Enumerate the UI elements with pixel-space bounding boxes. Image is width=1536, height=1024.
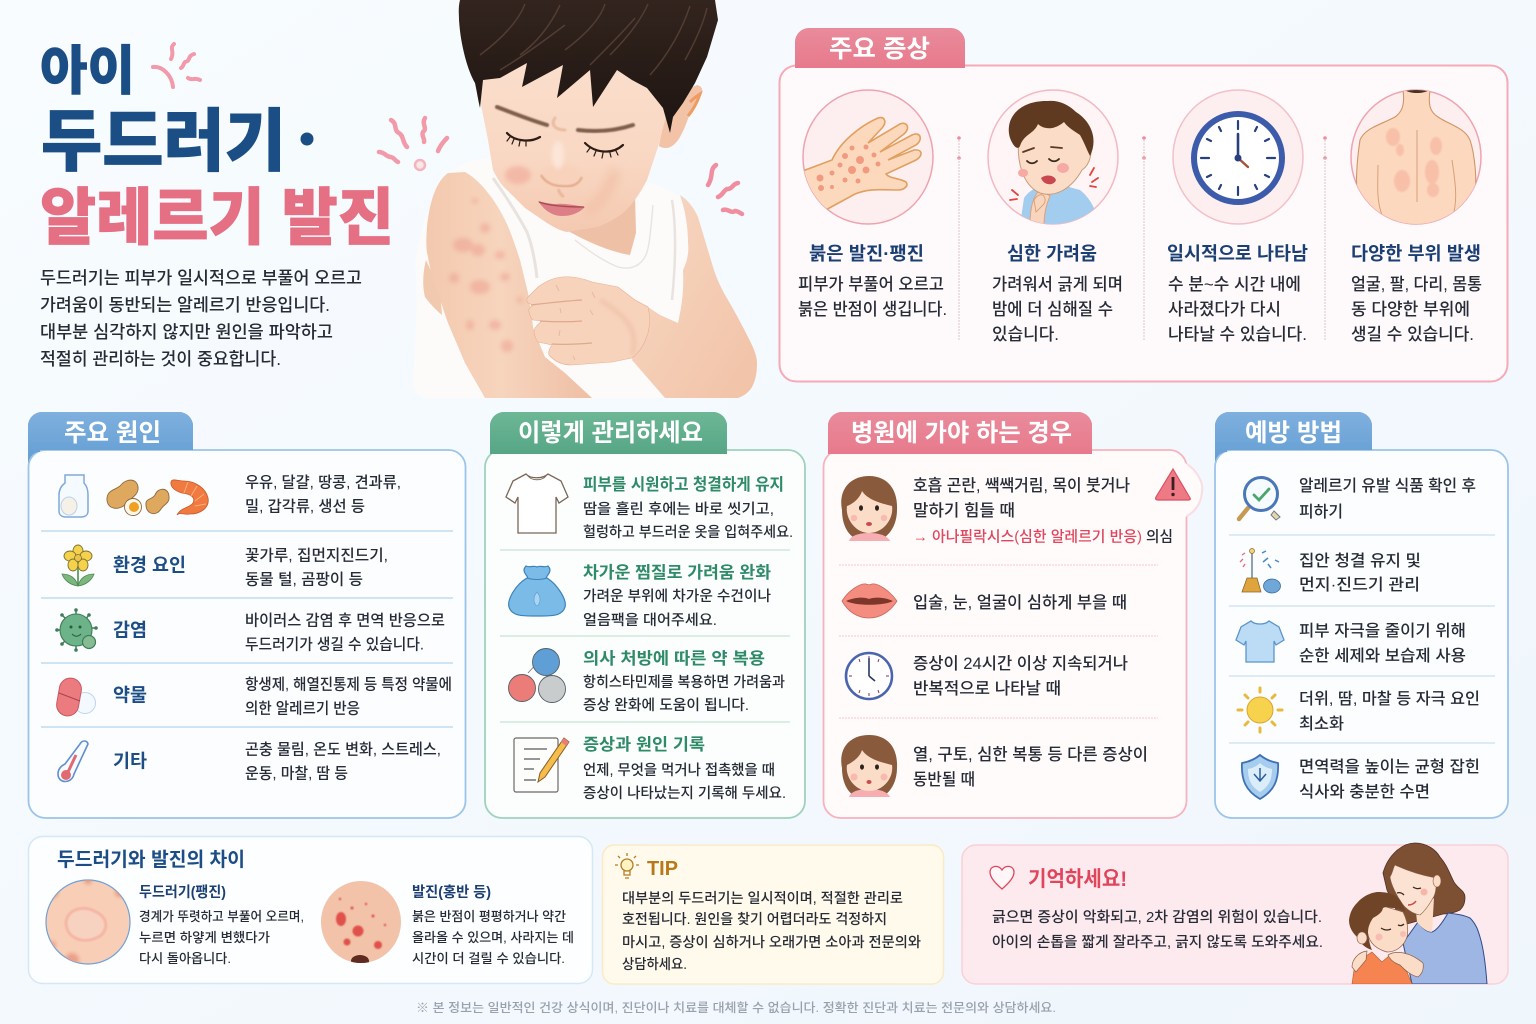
mouth [538,201,585,216]
heading: TIP: TIP [647,858,678,880]
prevention items text: 면역력을 높이는 균형 잡힌 [1299,758,1480,776]
panel: hives vs rash [28,836,592,984]
face [480,63,666,232]
panel: prevention [1215,412,1508,818]
text: remember: 긁으면 증상이 악화되고, 2차 감염의 위험이 있습니다. [992,909,1322,926]
prevention items text: 피하기 [1299,503,1343,521]
hospital items text: 동반될 때 [913,770,975,789]
prevention items text: 알레르기 유발 식품 확인 후 [1299,477,1476,495]
hospital items text: 호흡 곤란, 쌕쌕거림, 목이 붓거나 [913,476,1130,495]
manage items text: 차가운 찜질로 가려움 완화 [583,563,771,582]
text: tip: 대부분의 두드러기는 일시적이며, 적절한 관리로 [622,890,903,907]
tab text: prevention: 예방 방법 [1245,419,1342,447]
icon: broom [1240,548,1280,593]
footer disclaimer: ※ 본 정보는 일반적인 건강 상식이며, 진단이나 치료를 대체할 수 없습니다. 정확한 진단과 치료는 전문의와 상담하세요. [416,1000,1056,1015]
manage items text: 가려운 부위에 차가운 수건이나 [583,588,771,605]
hand [527,277,650,365]
cheek [505,166,531,184]
text: rash: 붉은 반점이 평평하거나 약간 [412,909,566,924]
text: hives: 두드러기(팽진) [139,884,226,901]
icon: clock small [846,653,892,699]
causes text: 항생제, 해열진통제 등 특정 약물에 [245,676,452,694]
icon: flower [62,545,94,586]
icon: shield [1242,755,1278,799]
label: drugs: 약물 [113,684,147,706]
icon: feverish girl [841,735,897,797]
icon: clock [1173,90,1303,224]
icon: itch squiggles near shoulder [379,118,447,170]
manage items text: 항히스타민제를 복용하면 가려움과 [583,674,785,691]
manage items text: 의사 처방에 따른 약 복용 [583,649,765,668]
icon: t-shirt [506,474,568,533]
text: tip: 마시고, 증상이 심하거나 오래가면 소아과 전문의와 [622,934,921,951]
label: environment: 환경 요인 [113,554,186,576]
text: hives: 누르면 하얗게 변했다가 [139,930,270,945]
prevention items text: 최소화 [1299,715,1344,733]
label: other: 기타 [113,750,147,772]
causes text: 우유, 달걀, 땅콩, 견과류, [245,474,401,492]
label: severe itch: 심한 가려움 [1007,243,1097,264]
icon: cold pack [509,566,565,616]
panel: main symptoms [780,28,1508,382]
photo: hives [46,876,130,967]
photo: rash [321,881,401,967]
label: temporary: 사라졌다가 다시 [1168,300,1281,319]
label: various areas [1351,243,1482,344]
tab: symptoms: 주요 증상 [829,35,930,63]
manage items text: 증상이 나타났는지 기록해 두세요. [583,785,786,802]
other arm and forearm [632,195,757,398]
icon: magnifier [1239,478,1280,520]
panel: how to manage [485,412,805,818]
label: various areas: 생길 수 있습니다. [1351,325,1474,344]
label: temporary [1167,243,1308,344]
prevention items text: 순한 세제와 보습제 사용 [1299,647,1466,665]
icon: peanuts and egg [107,480,169,516]
icon: light bulb [615,853,639,878]
child head [1367,905,1408,952]
causes text: 운동, 마찰, 땀 등 [245,764,348,782]
causes text: 꽃가루, 집먼지진드기, [245,546,388,564]
panel: tip [602,845,944,984]
icon: worried girl [841,476,897,541]
intro text: 가려움이 동반되는 알레르기 반응입니다. [40,295,330,315]
tab text: manage: 이렇게 관리하세요 [518,419,703,447]
hands [1388,952,1423,977]
manage items text [583,475,793,802]
icon: hand with rash [802,89,934,225]
intro text: 적절히 관리하는 것이 중요합니다. [40,349,281,369]
prevention items text [1299,477,1480,801]
title: 두드러기 [41,104,286,180]
icon: medicine balls [508,648,566,702]
tab: manage [490,412,727,460]
icon: notebook and pencil [514,738,569,792]
icon: itchy boy [988,90,1118,225]
text: hives: 경계가 뚜렷하고 부풀어 오르며, [139,909,304,924]
intro text: 대부분 심각하지 않지만 원인을 파악하고 [40,322,333,342]
mother face [1390,865,1436,915]
causes text: 밀, 갑각류, 생선 등 [245,498,365,516]
tank top [413,158,688,398]
manage items text: 피부를 시원하고 청결하게 유지 [583,475,784,494]
text: hives [139,884,304,966]
rash spots [449,198,523,352]
cheek shade [585,170,615,212]
text: rash: 시간이 더 걸릴 수 있습니다. [412,951,565,966]
brows [497,107,633,131]
tab: prevention [1215,412,1372,470]
tab: hospital [828,412,1092,460]
prevention items text: 식사와 충분한 수면 [1299,783,1430,801]
illustration: child scratching arm [413,0,757,398]
icon: shrimp [171,480,208,515]
icon: itch squiggles by title [153,44,200,87]
prevention items text: 피부 자극을 줄이기 위해 [1299,622,1466,640]
child shirt [1352,952,1412,984]
illustration: mother and child [1349,843,1487,984]
text: tip: 상담하세요. [622,956,687,973]
torso skin sliver [423,260,442,315]
mother neck [1416,898,1434,932]
tab text: causes: 주요 원인 [64,419,161,447]
label: temporary: 수 분~수 시간 내에 [1168,275,1301,294]
panel: main causes [28,412,466,818]
tab: symptoms [795,28,965,68]
causes text: 곤충 물림, 온도 변화, 스트레스, [245,740,441,758]
label: severe itch: 가려워서 긁게 되며 [992,275,1123,294]
label: red rash: 붉은 반점이 생깁니다. [798,300,947,319]
icon: sun [1238,688,1282,732]
text: tip: 호전됩니다. 원인을 찾기 어렵더라도 걱정하지 [622,911,887,928]
mother body [1403,913,1487,984]
hospital items text: 입술, 눈, 얼굴이 심하게 부을 때 [913,593,1127,612]
prevention items text: 더위, 땀, 마찰 등 자극 요인 [1299,690,1480,708]
causes text [245,474,452,782]
hospital items text: 의심 [1146,528,1173,546]
ear [659,85,702,148]
icon: heart [990,866,1014,889]
title: 아이 [40,42,135,101]
tab: causes [28,412,193,470]
text: remember [992,909,1323,951]
label: red rash: 피부가 부풀어 오르고 [798,275,944,294]
prevention items text: 먼지·진드기 관리 [1299,576,1420,594]
text: hives: 다시 돌아옵니다. [139,951,231,966]
hospital items text: 열, 구토, 심한 복통 등 다른 증상이 [913,745,1148,764]
label: red rash [798,243,947,319]
label: various areas: 얼굴, 팔, 다리, 몸통 [1351,275,1482,294]
child hair [1349,892,1405,950]
icon: warning triangle [1156,469,1190,500]
label: severe itch [992,243,1123,344]
label: severe itch: 있습니다. [992,325,1059,344]
mother hair [1383,843,1465,925]
text: rash [412,884,574,966]
icon: virus [55,608,98,652]
causes text: 바이러스 감염 후 면역 반응으로 [245,612,445,630]
label: temporary: 나타날 수 있습니다. [1168,325,1307,344]
closed eyes [507,133,623,158]
label: severe itch: 밤에 더 심해질 수 [992,300,1113,319]
icon: blue shirt [1236,621,1284,662]
label: various areas: 다양한 부위 발생 [1351,243,1481,264]
manage items text: 증상 완화에 도움이 됩니다. [583,697,749,714]
icon: swollen lips [842,584,897,618]
causes text: 의한 알레르기 반응 [245,700,360,718]
panel: remember [962,843,1508,984]
hospital items text: → 아나필락시스(심한 알레르기 반응) [913,528,1142,546]
intro text [40,268,362,369]
hospital items text: 반복적으로 나타날 때 [913,679,1061,698]
title [40,42,394,253]
nose [541,141,582,197]
intro text: 두드러기는 피부가 일시적으로 부풀어 오르고 [40,268,362,288]
warning bump [1184,462,1202,518]
hospital items text: 증상이 24시간 이상 지속되거나 [913,654,1128,673]
causes text: 두드러기가 생길 수 있습니다. [245,636,424,654]
icon: thermometer [58,741,88,782]
heading: difference: 두드러기와 발진의 차이 [57,849,245,871]
manage items text: 얼음팩을 대어주세요. [583,612,717,629]
text: rash: 발진(홍반 등) [412,884,491,901]
hospital items text [913,476,1173,789]
text: rash: 올라올 수 있으며, 사라지는 데 [412,930,574,945]
icon: pill [55,676,96,718]
text: remember: 아이의 손톱을 짧게 잘라주고, 긁지 않도록 도와주세요. [992,934,1323,951]
tab text: hospital: 병원에 가야 하는 경우 [851,419,1072,447]
label: temporary: 일시적으로 나타남 [1167,243,1308,264]
icon: back with rash [1351,86,1481,230]
icon: itch squiggles right [708,165,742,214]
upper arm with rash [426,172,592,398]
manage items text: 땀을 흘린 후에는 바로 씻기고, [583,501,774,518]
prevention items text: 집안 청결 유지 및 [1299,552,1421,570]
tank shading and collar [493,178,675,300]
neck [569,200,636,255]
hospital items text: 말하기 힘들 때 [913,501,1015,520]
hair [459,0,718,133]
label: various areas: 동 다양한 부위에 [1351,300,1470,319]
panel: when to see a doctor [824,412,1202,818]
causes text: 동물 털, 곰팡이 등 [245,570,363,588]
manage items text: 헐렁하고 부드러운 옷을 입혀주세요. [583,524,793,541]
label: infection: 감염 [113,620,147,640]
icon: milk bottle [59,475,88,517]
manage items text: 증상과 원인 기록 [583,735,705,754]
manage items text: 언제, 무엇을 먹거나 접촉했을 때 [583,762,775,779]
title: 알레르기 발진 [40,184,394,253]
label: red rash: 붉은 발진·팽진 [809,243,924,264]
heading: remember: 기억하세요! [1028,868,1127,891]
text: tip [622,890,921,973]
